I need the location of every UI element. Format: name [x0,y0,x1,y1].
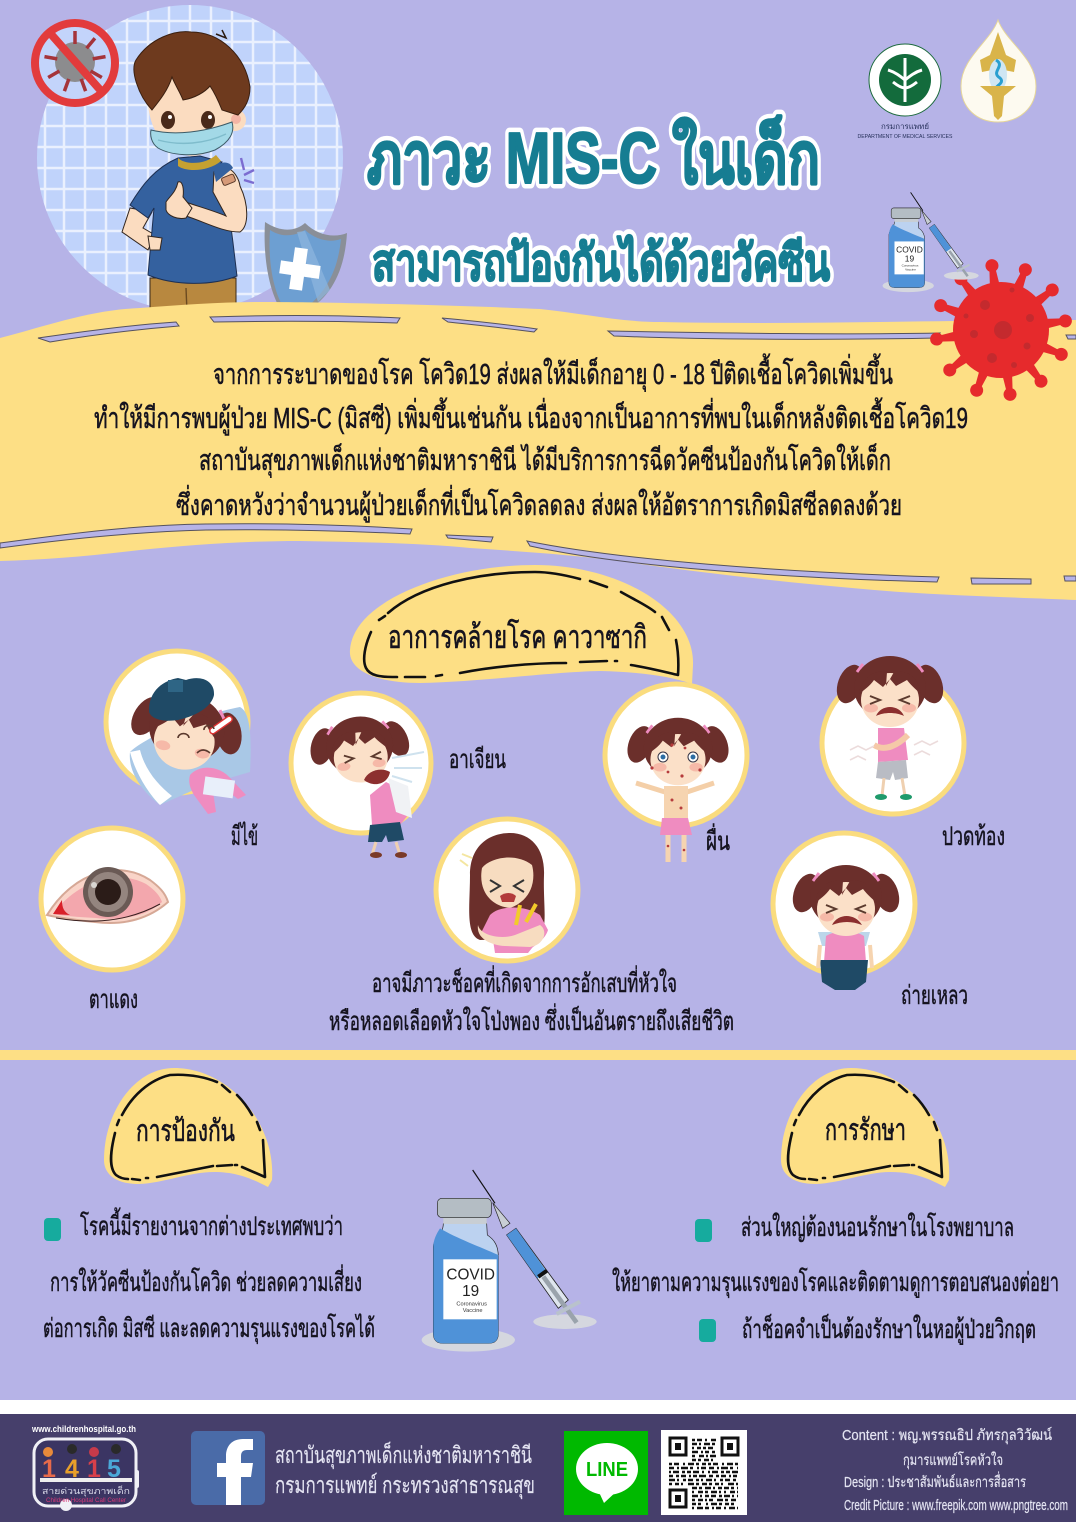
icon: facebook [191,1431,265,1505]
text: prevention list: ต่อการเกิด มิสซี และลดความรุนแรงของโรคได้ [43,1313,375,1344]
symptom: diarrhea [773,833,968,1010]
logo: hotline 1415: 1 [87,1455,101,1483]
logo: hotline 1415: 1 [42,1455,56,1483]
icon: small vial and syringe: Vaccine [905,267,916,271]
icon: line [564,1431,648,1515]
icon: covid vaccine vial and syringe: Coronavirus [456,1301,487,1307]
icon: no virus sign [35,23,115,103]
icon: small vial and syringe: Coronavirus [902,264,919,268]
symptom: rash [605,684,747,862]
symptom: shock heart inflammation [436,819,578,961]
icon: covid vaccine vial and syringe [422,1170,597,1352]
icon: line: LINE [586,1459,628,1481]
icon: qr code [661,1430,747,1515]
text: shock description [329,965,734,1036]
divider: yellow line [0,1050,1076,1060]
symptom: vomiting: อาเจียน [449,744,506,774]
illustration: vaccinated boy on grid circle [30,0,350,320]
text: treatment list [612,1212,1059,1345]
heading: prevention [104,1068,272,1187]
text: credits [842,1427,1068,1514]
heading: kawasaki-like symptoms: อาการคล้ายโรค คาวาซากิ [388,619,647,655]
text: prevention list [43,1207,375,1344]
logo: hotline 1415 [31,1424,139,1511]
title [367,115,830,291]
heading: kawasaki-like symptoms [350,565,693,684]
icon: covid vaccine vial and syringe: Vaccine [463,1308,483,1314]
icon: red coronavirus [929,258,1073,402]
symptom: red eye: ตาแดง [89,984,138,1014]
text: institute name: กรมการแพทย์ กระทรวงสาธารณสุข [275,1472,535,1499]
label: abdominal pain: ปวดท้อง [942,821,1005,851]
logo: queen sirikit institute drop [961,20,1036,122]
footer [0,1414,1076,1522]
icon: shield [265,222,347,312]
band: yellow stitched ribbon [0,302,1076,600]
text: prevention list: การให้วัคซีนป้องกันโควิด ช่วยลดความเสี่ยง [50,1264,362,1297]
paragraph: intro text [94,353,968,523]
heading: prevention: การป้องกัน [136,1115,235,1148]
icon: small vial and syringe: COVID [896,244,923,254]
icon: covid vaccine vial and syringe: COVID [446,1266,495,1283]
text: shock description: อาจมีภาวะช็อคที่เกิดจากการอักเสบที่หัวใจ [372,965,677,998]
logo: ministry of public health: กรมการแพทย์ [881,122,929,131]
text: credits: กุมารแพทย์โรคหัวใจ [903,1451,1003,1470]
symptom: red eye [41,828,183,1014]
white strip [0,1400,1076,1414]
icon: small vial and syringe: 19 [905,254,914,264]
logo: hotline 1415: Children Hospital Call Center [46,1498,126,1504]
text: prevention list: โรคนี้มีรายงานจากต่างประเทศพบว่า [80,1207,343,1241]
icon: covid vaccine vial and syringe: 19 [462,1283,479,1300]
logo: hotline 1415: www.childrenhospital.go.th [31,1424,136,1435]
symptom: rash: ผื่น [706,823,730,856]
text: institute name [275,1440,535,1499]
logo: ministry of public health: DEPARTMENT OF MEDICAL SERVICES [858,134,953,140]
logo: hotline 1415: 4 [65,1455,79,1483]
heading: treatment [781,1068,949,1187]
text: shock description: หรือหลอดเลือดหัวใจโป่งพอง ซึ่งเป็นอันตรายถึงเสียชีวิต [329,1003,734,1036]
symptom: diarrhea: ถ่ายเหลว [901,980,968,1010]
label: fever: มีไข้ [231,821,258,851]
symptom: vomiting [291,693,506,858]
logo: hotline 1415: 5 [107,1455,121,1483]
logo: hotline 1415: สายด่วนสุขภาพเด็ก [42,1484,130,1497]
icon: small vial and syringe [883,192,979,292]
symptom: fever [106,651,254,814]
symptom: abdominal pain [822,656,964,814]
heading: treatment: การรักษา [825,1114,906,1147]
logo: ministry of public health [858,44,953,140]
text: institute name: สถาบันสุขภาพเด็กแห่งชาติมหาราชินี [275,1440,532,1469]
